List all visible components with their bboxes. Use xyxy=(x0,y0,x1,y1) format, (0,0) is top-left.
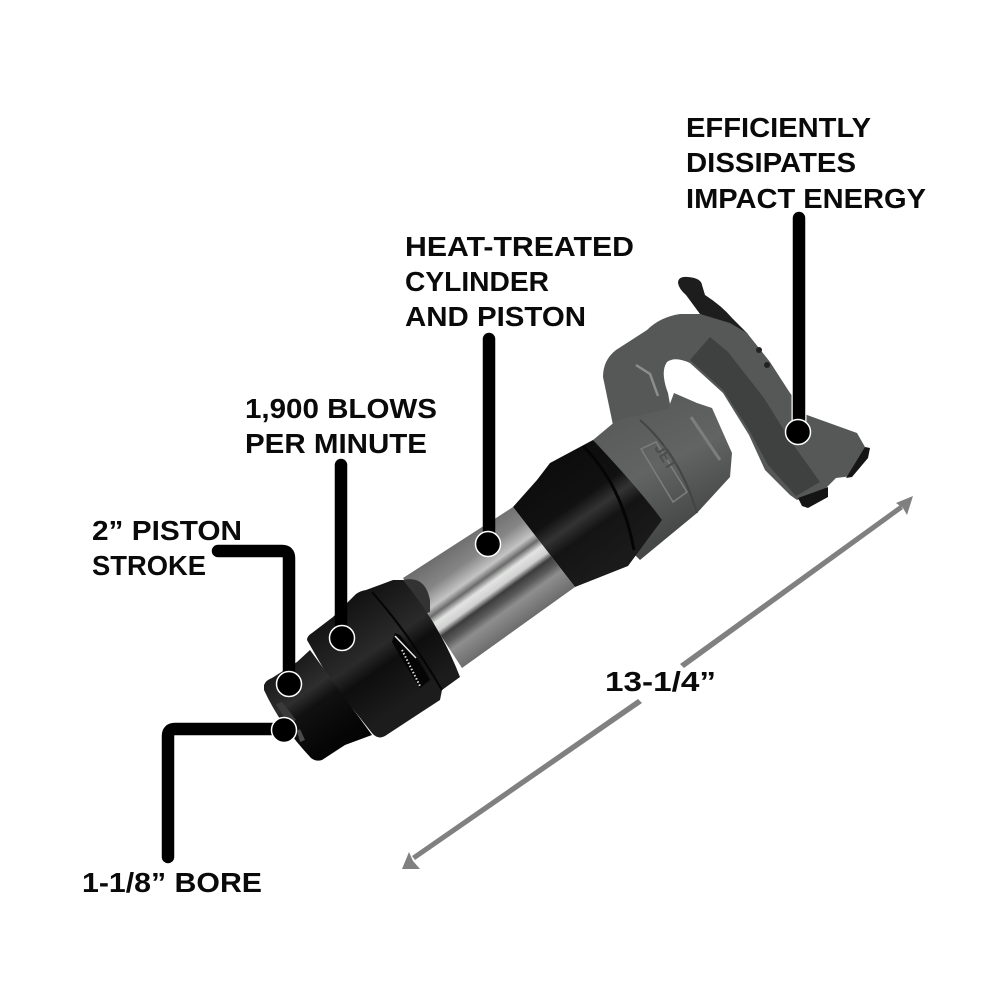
collar xyxy=(307,580,460,737)
callout: impact energy: EFFICIENTLY xyxy=(686,112,871,143)
air hammer tool xyxy=(264,277,870,761)
callout: piston stroke xyxy=(92,515,302,696)
lever xyxy=(678,277,748,334)
steel cylinder xyxy=(403,507,575,668)
spring slot xyxy=(392,633,430,688)
callout: bore: 1-1/8” BORE xyxy=(82,867,262,898)
tip xyxy=(264,650,372,761)
callout: cylinder and piston: AND PISTON xyxy=(405,301,586,332)
callout: piston stroke: STROKE xyxy=(92,550,206,581)
callout: cylinder and piston xyxy=(405,231,634,556)
body: JET xyxy=(651,441,680,473)
callout: blows per minute: PER MINUTE xyxy=(245,428,427,459)
callout: impact energy: IMPACT ENERGY xyxy=(686,183,926,214)
dimension label: 13-1/4” xyxy=(605,666,716,697)
callout: piston stroke: 2” PISTON xyxy=(92,515,242,546)
callout: impact energy xyxy=(686,112,926,444)
callout: impact energy: DISSIPATES xyxy=(686,147,856,178)
black sleeve xyxy=(513,440,662,587)
dimension arrow xyxy=(402,496,913,869)
handle xyxy=(603,314,870,508)
callout: blows per minute xyxy=(245,393,437,650)
callout: cylinder and piston: CYLINDER xyxy=(405,266,549,297)
body xyxy=(593,393,732,560)
callout: bore xyxy=(82,718,296,898)
callout: cylinder and piston: HEAT-TREATED xyxy=(405,231,634,262)
callout: blows per minute: 1,900 BLOWS xyxy=(245,393,437,424)
